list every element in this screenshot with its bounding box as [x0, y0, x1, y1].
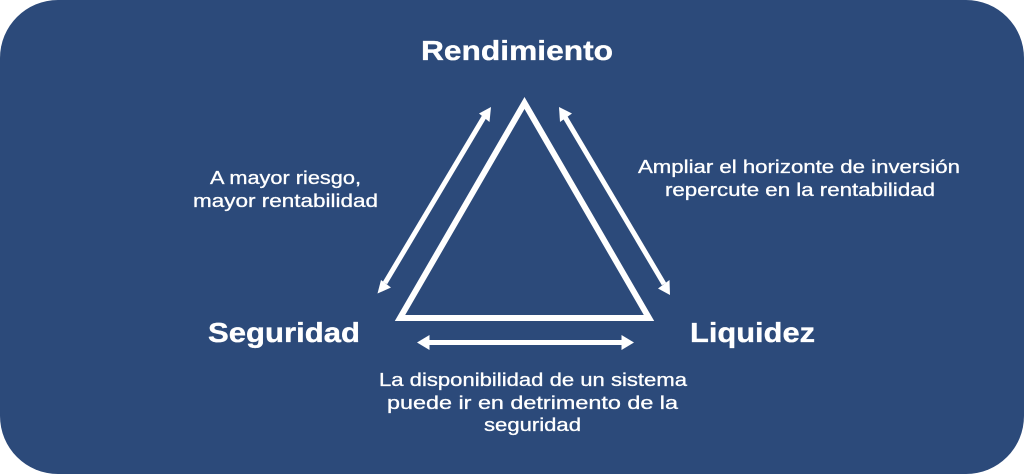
- text: bottom caption: La disponibilidad de un sistema: [379, 370, 688, 390]
- heading: Liquidez: Liquidez: [690, 317, 815, 348]
- arrow: left double arrow: [378, 107, 491, 294]
- icon: triangle: [400, 103, 649, 318]
- text: bottom caption: puede ir en detrimento de la: [387, 393, 679, 413]
- text: left caption: mayor rentabilidad: [193, 191, 378, 211]
- text: bottom caption: seguridad: [484, 415, 581, 435]
- text: right caption: repercute en la rentabilidad: [665, 180, 935, 200]
- arrow: right double arrow: [559, 107, 670, 295]
- heading: Seguridad: Seguridad: [208, 317, 360, 348]
- arrow: bottom double arrow: [417, 335, 634, 350]
- text: bottom caption: [379, 370, 688, 435]
- text: left caption: A mayor riesgo,: [210, 168, 361, 188]
- text: left caption: [193, 168, 378, 211]
- heading: Rendimiento: Rendimiento: [421, 35, 613, 66]
- text: right caption: Ampliar el horizonte de inversión: [638, 157, 960, 177]
- text: right caption: [638, 157, 960, 200]
